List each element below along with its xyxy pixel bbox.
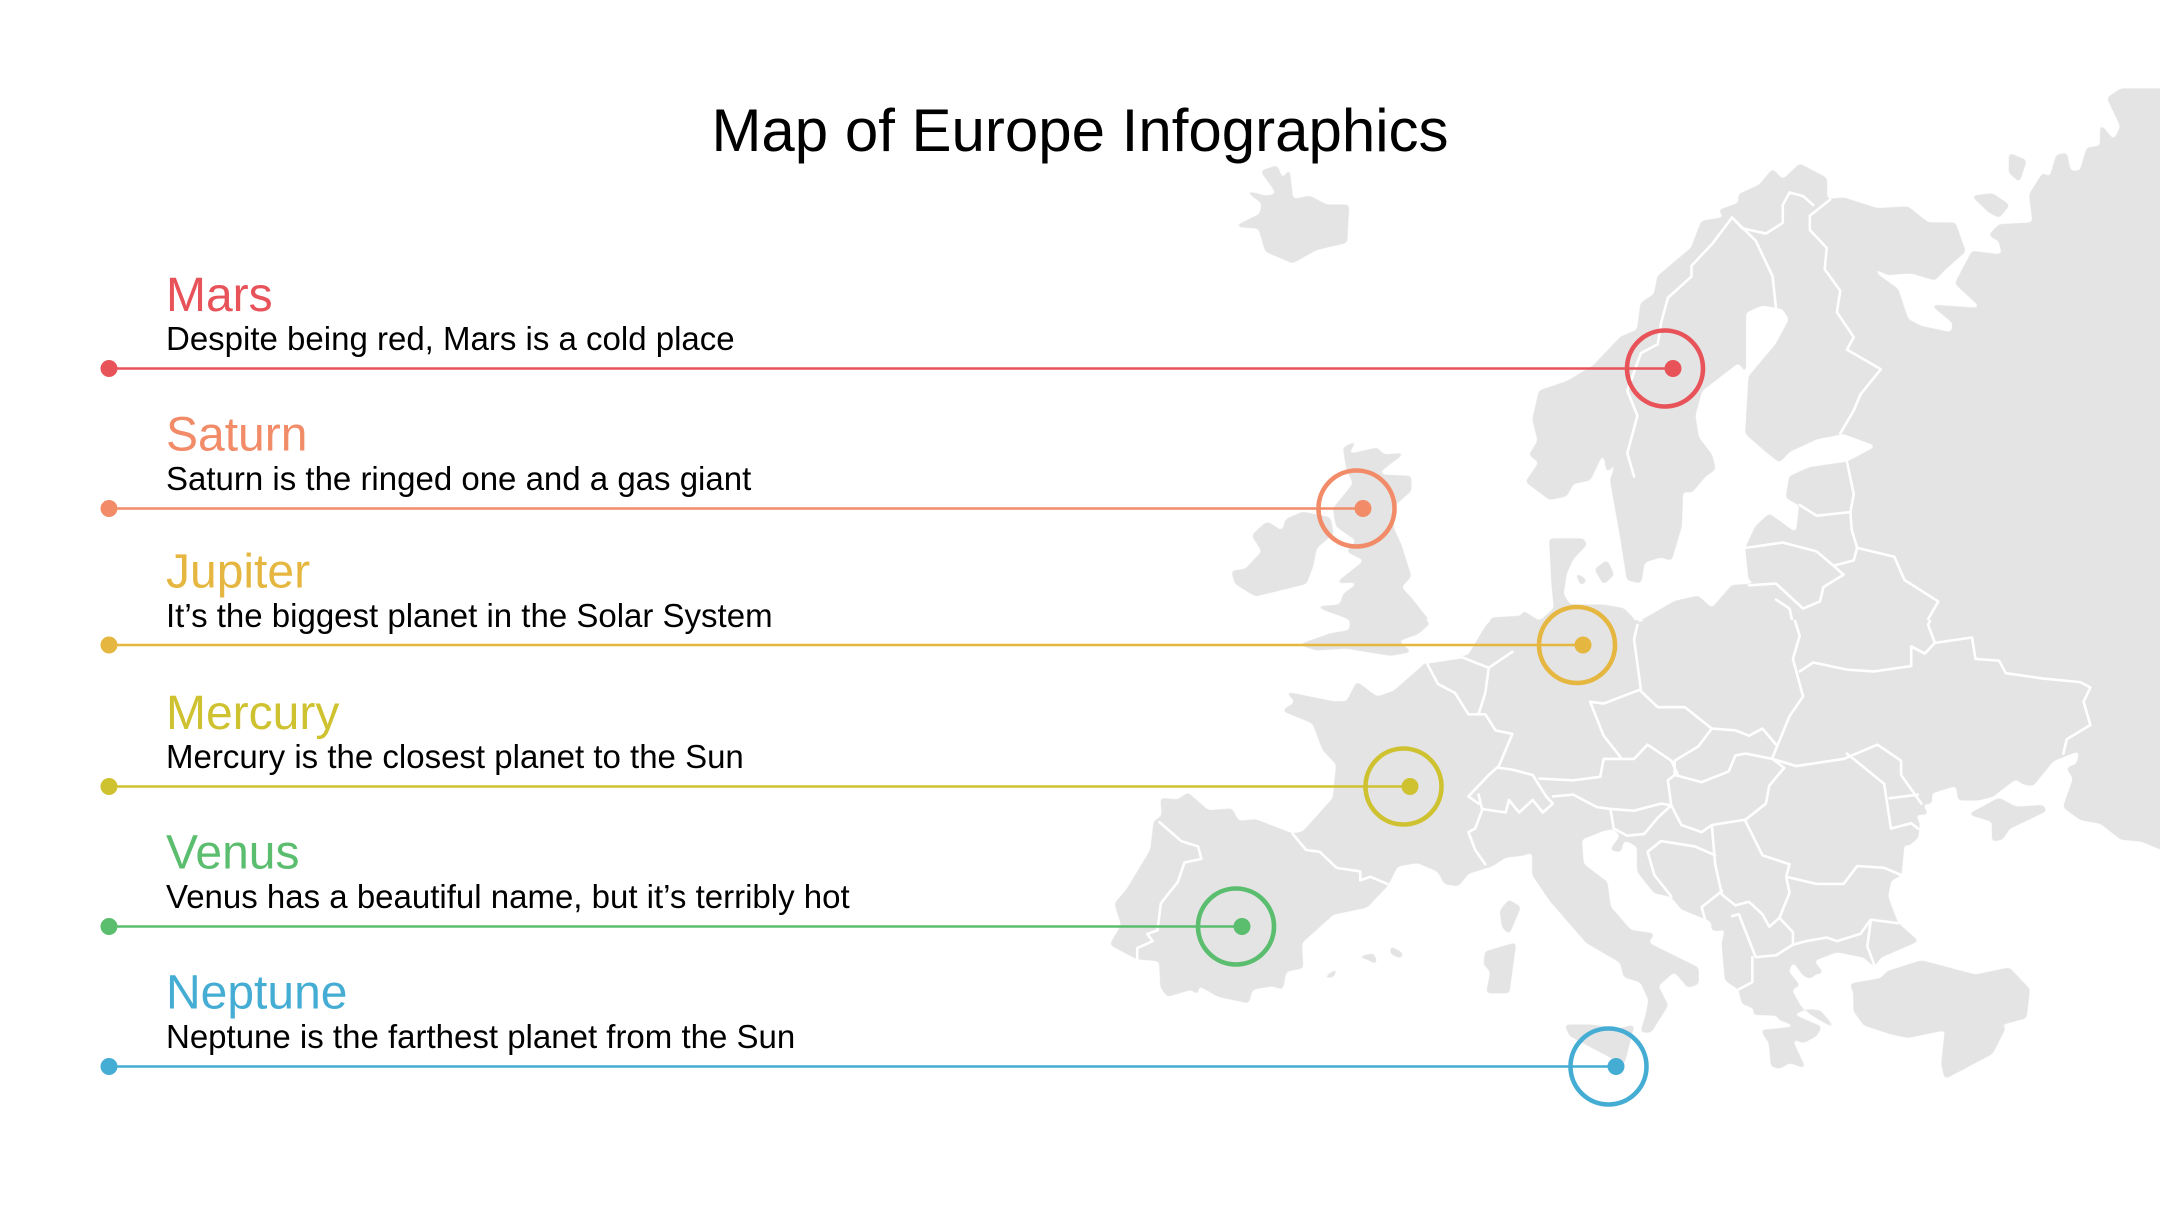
Great Britain south bbox=[1303, 620, 1429, 656]
heading: Saturn: Saturn bbox=[166, 408, 307, 462]
ring marker: Saturn bbox=[1318, 470, 1394, 546]
map of Europe bbox=[1110, 89, 2160, 1079]
Scandinavia and Russia bbox=[1526, 89, 2160, 687]
end dot: Saturn bbox=[1354, 500, 1372, 517]
southern land masses bbox=[1111, 620, 2160, 1078]
Kanin peninsula bbox=[1972, 194, 2009, 217]
Great Britain bbox=[1320, 442, 1428, 620]
Iceland bbox=[1235, 166, 1349, 263]
description: Mercury: Mercury is the closest planet to the Sun bbox=[166, 738, 744, 775]
ring marker: Mars bbox=[1627, 330, 1703, 406]
item: Jupiter bbox=[100, 546, 1615, 683]
description: Mars: Despite being red, Mars is a cold place bbox=[166, 320, 735, 357]
Turkey bbox=[1850, 961, 2030, 1037]
heading: Jupiter: Jupiter bbox=[166, 546, 310, 598]
description: Saturn: Saturn is the ringed one and a gas giant bbox=[166, 460, 751, 497]
ring marker: Jupiter bbox=[1539, 607, 1615, 683]
northern land masses bbox=[1232, 88, 2160, 620]
leader line: Mercury bbox=[109, 785, 1410, 788]
item: Mercury bbox=[100, 687, 1442, 824]
start dot: Venus bbox=[100, 918, 118, 935]
leader line: Mars bbox=[109, 367, 1673, 370]
end dot: Mercury bbox=[1402, 778, 1418, 795]
start dot: Mercury bbox=[100, 778, 118, 795]
item: Venus bbox=[100, 826, 1274, 964]
leader line: Jupiter bbox=[109, 644, 1583, 646]
Danish islands bbox=[1577, 562, 1614, 584]
Crimea bbox=[1969, 798, 2046, 841]
description: Neptune: Neptune is the farthest planet from the Sun bbox=[166, 1018, 795, 1055]
heading: Mercury: Mercury bbox=[166, 687, 339, 740]
heading: Neptune: Neptune bbox=[166, 966, 347, 1020]
map: central and southern Europe bbox=[1111, 620, 2160, 1078]
Turkey south coast bbox=[1942, 1027, 2006, 1079]
Balearic islands bbox=[1323, 946, 1403, 979]
end dot: Neptune bbox=[1608, 1058, 1624, 1075]
Aegean islands bbox=[1801, 1007, 1832, 1026]
southern borders bbox=[1137, 600, 2090, 989]
map: northern Europe bbox=[1232, 88, 2160, 620]
Sardinia bbox=[1484, 943, 1516, 993]
Sicily bbox=[1565, 1025, 1634, 1064]
title: Map of Europe Infographics bbox=[711, 97, 1449, 164]
item: Mars bbox=[100, 269, 1703, 406]
description: Jupiter: It’s the biggest planet in the Solar System bbox=[166, 597, 773, 634]
ring marker: Venus bbox=[1198, 888, 1274, 964]
mainland Europe bbox=[1111, 620, 2160, 1068]
end dot: Venus bbox=[1234, 918, 1250, 935]
start dot: Jupiter bbox=[100, 636, 118, 654]
start dot: Mars bbox=[100, 360, 118, 377]
item: Saturn bbox=[100, 408, 1394, 546]
Denmark and northern Germany bbox=[1490, 538, 1634, 620]
heading: Venus: Venus bbox=[166, 826, 299, 880]
heading: Mars: Mars bbox=[166, 269, 273, 322]
Ireland bbox=[1232, 512, 1333, 596]
description: Venus: Venus has a beautiful name, but it’s terribly hot bbox=[166, 878, 850, 915]
northern borders bbox=[1627, 192, 1938, 640]
Corsica bbox=[1500, 900, 1520, 934]
start dot: Saturn bbox=[100, 500, 118, 517]
leader line: Venus bbox=[109, 925, 1242, 928]
item: Neptune bbox=[100, 966, 1646, 1104]
ring marker: Neptune bbox=[1570, 1028, 1646, 1104]
leader line: Saturn bbox=[109, 507, 1363, 510]
start dot: Neptune bbox=[100, 1058, 118, 1075]
ring marker: Mercury bbox=[1366, 748, 1442, 824]
Arctic island bbox=[2009, 153, 2026, 182]
leader line: Neptune bbox=[109, 1065, 1616, 1068]
end dot: Mars bbox=[1664, 360, 1682, 377]
end dot: Jupiter bbox=[1574, 636, 1592, 654]
